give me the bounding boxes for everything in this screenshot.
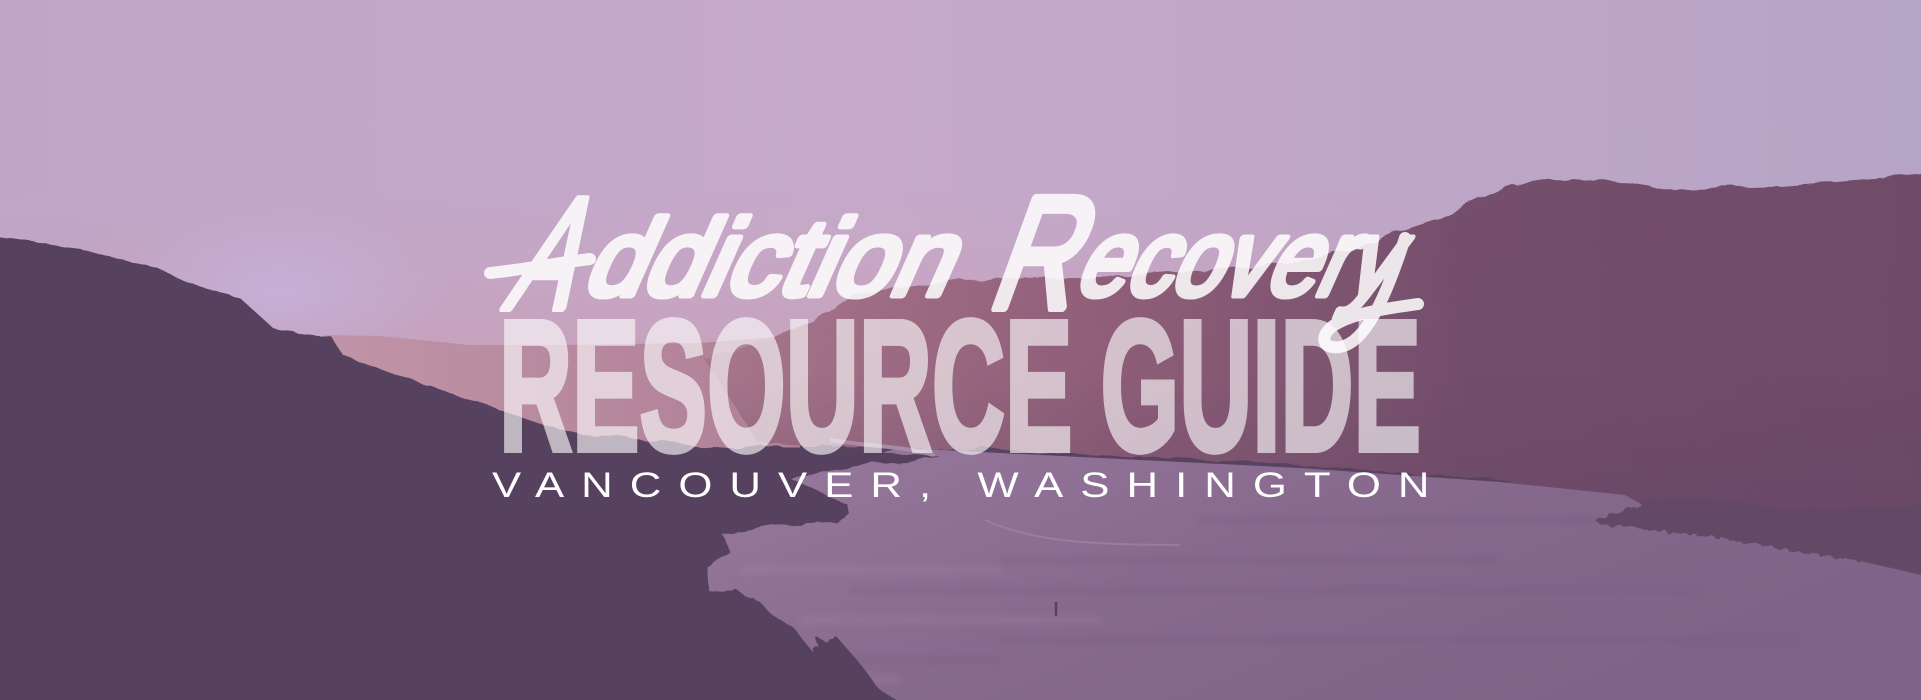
sky background <box>0 0 1921 420</box>
right shoreline <box>1595 498 1921 572</box>
swash: A crossbar <box>490 259 590 273</box>
foreground tree line <box>700 590 895 700</box>
title: Addiction Recovery <box>487 164 1431 347</box>
title: Addiction Recovery: R <box>972 164 1122 343</box>
left dark hillside and peninsula <box>0 236 940 700</box>
channel marker <box>1055 602 1057 616</box>
river water <box>690 448 1921 700</box>
river sliver <box>830 440 935 456</box>
subtitle: location: VANCOUVER, WASHINGTON <box>492 466 1430 505</box>
water wake <box>985 520 1180 545</box>
title: Addiction Recovery: ddiction <box>570 198 988 318</box>
title: Addiction Recovery: ecovery <box>1062 198 1431 318</box>
title: Addiction Recovery: A <box>487 166 628 342</box>
right mountains <box>705 174 1921 580</box>
far pink ridge <box>325 335 800 480</box>
swash: y tail <box>1324 238 1418 347</box>
water ripples <box>740 520 1800 680</box>
